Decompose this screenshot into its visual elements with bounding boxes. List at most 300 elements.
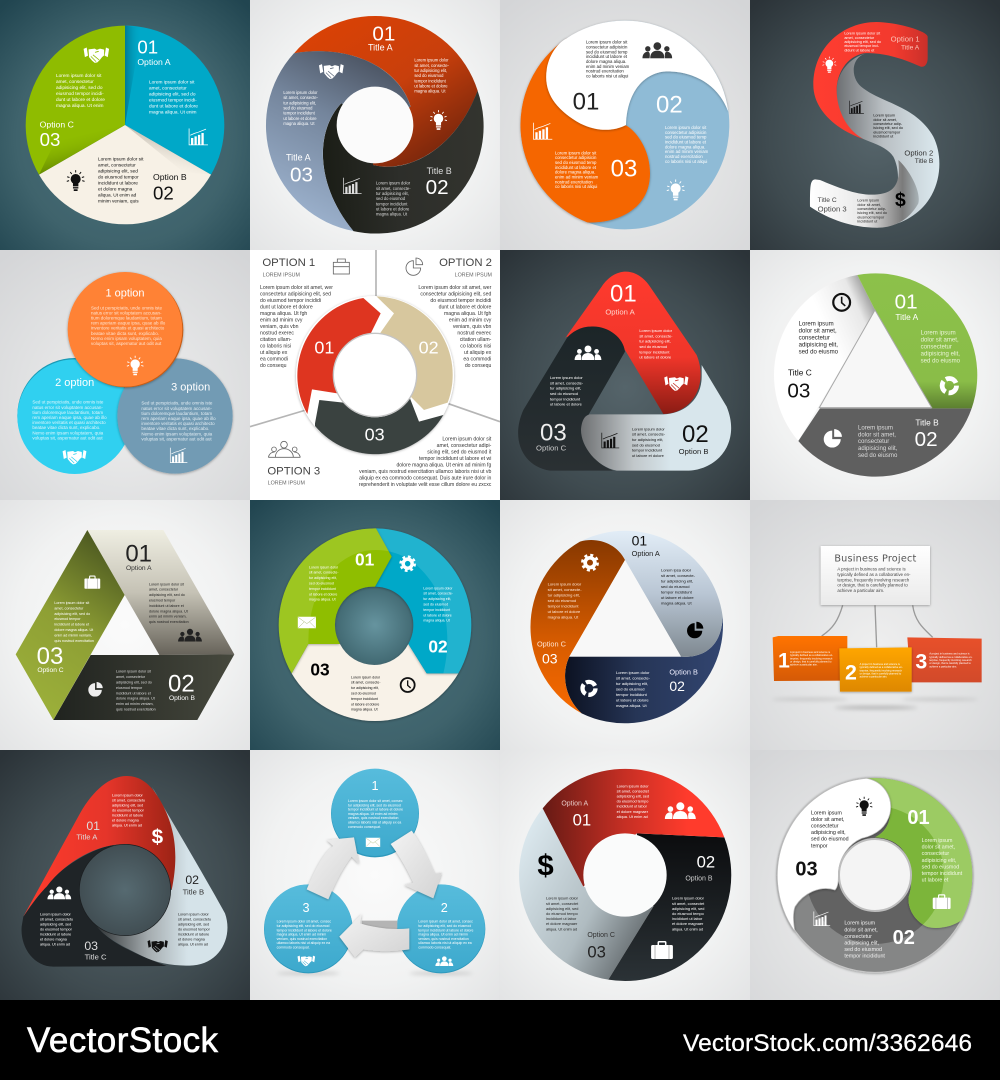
body text grey: Lorem ipsum bbox=[858, 425, 893, 431]
body text cream: sit amet, consecte- bbox=[351, 681, 381, 685]
body text blue: sed do eiusmod bbox=[661, 584, 690, 589]
body text olive: quis nostrud exercitation bbox=[54, 639, 94, 643]
body text A: amet, consectetur bbox=[149, 86, 187, 92]
number 1: 1 bbox=[371, 779, 379, 793]
body text black: do eiusmod tempo bbox=[672, 912, 704, 916]
body text blue: Nemo enim ipsam voluptatem, quia bbox=[32, 430, 104, 435]
body text black: Lorem ipsum dolor bbox=[376, 181, 411, 186]
body text white: dolor sit amet, bbox=[811, 817, 844, 823]
number 02: 02 bbox=[185, 873, 199, 887]
body text orange lobe: sed do eiusmod temp bbox=[555, 160, 597, 165]
card 2 text: achieve a particular aim. bbox=[860, 675, 888, 679]
body text beige: dolore magna aliqua. Ut bbox=[149, 609, 188, 613]
body text olive: enim ad minim veniam, bbox=[54, 633, 92, 637]
body text orange lobe: co laboris nisi ut aliqui bbox=[555, 184, 597, 189]
subheading 2: LOREM IPSUM bbox=[455, 272, 492, 278]
card 2 text: typically defined as a collaborative en- bbox=[860, 665, 903, 669]
body text red: et dolore magnaer bbox=[617, 810, 649, 814]
body text light: sed do eiusmod bbox=[632, 442, 660, 447]
body text light: incididunt ut labore bbox=[178, 932, 209, 936]
number 03: 03 bbox=[40, 129, 60, 150]
body text white: Lorem ipsum bbox=[811, 810, 842, 816]
body text blue: tempor incididunt bbox=[661, 590, 693, 595]
body text orange lobe: nostrud exercitation bbox=[555, 179, 593, 184]
body text light: tempor incididunt bbox=[632, 448, 663, 453]
icon: clock bbox=[401, 678, 415, 692]
body text option 3: Lorem ipsum dolor sit bbox=[442, 437, 492, 443]
heading Option 2: Option 2 bbox=[904, 149, 933, 158]
body text black: et dolore magnaer bbox=[672, 922, 704, 926]
body text light: Lorem ipsum dolor bbox=[178, 912, 210, 916]
number 03: 03 bbox=[795, 858, 818, 880]
body text 2: ullamco laboris nisi ut aliquip ex ea bbox=[418, 941, 472, 945]
body text dark: tempor incididunt bbox=[550, 396, 581, 401]
body text option 2: nostrud exerec bbox=[457, 330, 492, 336]
body text C: adipisicing elit, sed do bbox=[56, 85, 103, 91]
body text blue: Lorem ipsa dolor bbox=[661, 568, 692, 573]
sector C green bbox=[26, 26, 125, 175]
body text olive: Lorem ipsum dolor sit bbox=[54, 601, 89, 605]
body text black: aliqua. Ut enim ad bbox=[672, 927, 703, 931]
body text white: adipisicing elit, bbox=[811, 830, 846, 836]
body text grey: tempor incididunt bbox=[283, 111, 316, 116]
band 02 light bbox=[581, 365, 731, 471]
body text orange: magna aliqua. Ut bbox=[548, 614, 579, 619]
body text olive: amet, consectetur bbox=[54, 606, 84, 610]
body text steel: Sed ut perspiciatis, unde omnis iste bbox=[141, 401, 213, 406]
lobe 01 white bbox=[546, 21, 728, 130]
body text 2: magna aliqua. Ut enim ad minim bbox=[418, 933, 468, 937]
body text orange: sit amet, consecte- bbox=[548, 587, 582, 592]
body text A: Lorem ipsum dolor sit bbox=[149, 80, 195, 86]
body text blue: Lorem ipsum dolor bbox=[423, 586, 453, 590]
body text navy: sed do eiusmod bbox=[616, 686, 645, 691]
segment dark bbox=[22, 845, 167, 967]
label Option C: Option C bbox=[40, 119, 74, 129]
body text red: ut labore et dolore bbox=[639, 355, 672, 360]
heading Option 1: Option 1 bbox=[891, 35, 920, 44]
body text 2: veniam, quis nostrud exercitation bbox=[418, 937, 469, 941]
body text orange lobe: Lorem ipsum dolor sit bbox=[555, 150, 597, 155]
band 03 dark bbox=[518, 327, 625, 471]
body text white: consectetur bbox=[799, 336, 830, 342]
label Option C: Option C bbox=[587, 932, 615, 939]
body text cream: magna aliqua. Ut bbox=[351, 708, 378, 712]
panel: three blue circles with arrows bbox=[250, 750, 500, 1000]
card 2 bbox=[839, 647, 912, 692]
number 02: 02 bbox=[153, 182, 174, 203]
circle 2 blue bbox=[17, 358, 132, 474]
panel: rounded triangle ribbon bbox=[500, 250, 750, 500]
body text light: aliqua. Ut enim ad bbox=[546, 927, 577, 931]
panel: circle with triangle cut-out bbox=[750, 250, 1000, 500]
segment red bbox=[543, 769, 724, 887]
label Option B: Option B bbox=[669, 667, 698, 676]
body text blue: tur adipisicing elit, bbox=[661, 579, 693, 584]
body text 1: Lorem ipsum dolor sit amet, consec bbox=[348, 799, 403, 803]
number 03: 03 bbox=[542, 650, 558, 666]
body text white lobe: dolore magna aliqua. bbox=[586, 59, 626, 64]
segment blue grey bbox=[580, 531, 723, 657]
body text light: et dolore magnaer bbox=[546, 922, 578, 926]
body text 1: ullamco laboris nisi ut aliquip ex ea bbox=[348, 820, 401, 824]
body text option 1: nostrud exerec bbox=[260, 330, 294, 336]
panel: teal pie with three sectors bbox=[0, 0, 250, 250]
body text B: adipisicing elit, sed bbox=[98, 168, 138, 174]
inner triangle bbox=[819, 310, 932, 408]
segment green bbox=[279, 528, 392, 673]
body text 1: tur adipisicing elit, sed do eiusmod bbox=[348, 803, 401, 807]
body text red: sed do eiusmod bbox=[414, 73, 444, 78]
body text red: tempor incididunt bbox=[639, 349, 670, 354]
body text white: adipisicing elit, bbox=[799, 342, 838, 348]
body text red: didunt ut labore et bbox=[844, 48, 875, 52]
body text grey: adipisicing elit, bbox=[858, 446, 898, 452]
body text option 2: citation ullam- bbox=[460, 337, 492, 343]
icon: pie outline bbox=[406, 258, 423, 275]
body text red: do eiusmod tempor bbox=[112, 808, 145, 812]
body text grey: magna aliqua. Ut bbox=[283, 121, 315, 126]
heading OPTION 3: OPTION 3 bbox=[267, 466, 320, 478]
body text white lobe: Lorem ipsum dolor sit bbox=[586, 40, 628, 45]
body text white: sed do eiusmod bbox=[811, 837, 849, 843]
body text B: incididunt ut labore bbox=[98, 180, 138, 186]
body text steel: natus error sit voluptatem accusan- bbox=[141, 406, 212, 411]
board text: achieve a particular aim. bbox=[837, 588, 884, 593]
card 3 text: A project in business and science is bbox=[929, 652, 970, 656]
body text light: do eiusmod tempor bbox=[178, 927, 211, 931]
body text grey: tempor incididunt bbox=[844, 954, 885, 960]
body text red: adipisicing elit, sed bbox=[112, 803, 143, 807]
body text navy: tur adipisicing elit, bbox=[616, 681, 648, 686]
body text green: adipisicing elit, bbox=[921, 351, 960, 357]
icon: briefcase bbox=[84, 576, 100, 589]
body text C: dunt ut labore et dolore bbox=[56, 97, 105, 103]
label Title B: Title B bbox=[915, 418, 939, 428]
label Option B: Option B bbox=[169, 695, 195, 702]
body text red: adipisicing elit, sed bbox=[617, 795, 649, 799]
number 01: 01 bbox=[355, 550, 375, 570]
body text green: dolor sit amet, bbox=[922, 845, 955, 851]
footer bar bbox=[0, 1000, 1000, 1080]
body text bottom: dolor sit amet, bbox=[857, 203, 881, 207]
number 01: 01 bbox=[632, 533, 647, 549]
icon: chart bbox=[189, 128, 208, 145]
label Option B: Option B bbox=[679, 447, 708, 456]
label Title C: Title C bbox=[818, 197, 837, 204]
body text green: magna aliqua. Ut bbox=[309, 598, 336, 602]
body text A: magna aliqua. Ut enim bbox=[149, 110, 197, 116]
body text dark: ut labore et dolore bbox=[550, 402, 583, 407]
ribbon top red bbox=[813, 22, 928, 139]
body text dark: tur adipisicing elit, bbox=[550, 386, 581, 391]
body text navy: tempor incididunt bbox=[616, 692, 648, 697]
heading 2 option: 2 option bbox=[55, 377, 94, 389]
body text bottom: Lorem ipsum bbox=[857, 199, 879, 203]
body text orange: sed do eiusmod bbox=[548, 598, 576, 603]
card 2 text: A project in business and science is bbox=[860, 662, 901, 666]
icon: handshake bbox=[319, 64, 344, 79]
body text black: sed do eiusmod bbox=[376, 196, 406, 201]
segment grey inner bbox=[806, 806, 944, 944]
circle 1 bbox=[331, 769, 419, 857]
body text B: minim veniam, quis bbox=[98, 198, 139, 204]
body text blue: ut labore et dolore bbox=[423, 613, 452, 617]
label Option A: Option A bbox=[126, 565, 152, 572]
number 02: 02 bbox=[168, 671, 195, 698]
number 03: 03 bbox=[611, 156, 637, 183]
body text dark: aliqua. Ut enim ad bbox=[40, 942, 70, 946]
body text 1: tempor incididunt ut labore et dolore bbox=[348, 808, 403, 812]
segment navy bbox=[565, 617, 723, 723]
icon: handshake bbox=[298, 956, 315, 966]
body text blue lobe: incididunt ut labore et bbox=[665, 139, 707, 144]
body text dark: incididunt ut labore et bbox=[116, 691, 151, 695]
body text dark: sed do eiusmod bbox=[550, 391, 578, 396]
body text grey: dolor sit amet, bbox=[844, 927, 878, 933]
icon: people bbox=[47, 886, 71, 899]
body text option 2: magna aliqua. Ut fgh bbox=[444, 311, 491, 317]
circle 3 steel bbox=[117, 358, 233, 474]
body text navy: Lorem ipsum dolor bbox=[616, 670, 650, 675]
number 03: 03 bbox=[540, 420, 567, 447]
centre hole bbox=[336, 586, 414, 664]
body text green: consectetur bbox=[921, 345, 952, 351]
body text blue: ut labore et dolore bbox=[661, 595, 694, 600]
icon: bulb bbox=[856, 797, 872, 816]
body text C: Lorem ipsum dolor sit bbox=[56, 73, 102, 79]
body text A: adipisicing elit, sed do bbox=[149, 92, 196, 98]
body text option 2: dunt ut labore et dolore bbox=[439, 304, 491, 310]
label Option B: Option B bbox=[153, 172, 187, 182]
body text blue: tempor incididunt bbox=[423, 608, 450, 612]
body text beige: amet, consectetur bbox=[149, 588, 179, 592]
number 01: 01 bbox=[314, 337, 334, 357]
body text cream: tempor incididunt bbox=[351, 697, 378, 701]
label Option C: Option C bbox=[537, 639, 567, 648]
segment white bbox=[777, 778, 891, 932]
body text steel: Nemo enim ipsam voluptatem, quia bbox=[141, 431, 213, 436]
card 1 bbox=[773, 636, 847, 681]
card 2 text: terprise, frequently involving research bbox=[860, 668, 903, 672]
body text C: magna aliqua. Ut enim bbox=[56, 103, 104, 109]
body text green: sed do eiusmo bbox=[921, 358, 961, 364]
body text red: sit amet, consecte- bbox=[639, 333, 673, 338]
body text dark: amet, consectetur bbox=[116, 675, 146, 679]
body text orange: voluptas sit, aspernatur aut odit aut bbox=[91, 341, 162, 346]
number 2: 2 bbox=[845, 660, 857, 684]
body text red: incididunt ut labore bbox=[112, 813, 143, 817]
body text cream: tur adipisicing elit, bbox=[351, 686, 379, 690]
segment red bbox=[23, 776, 175, 917]
body text light: aliqua. Ut enim ad bbox=[178, 942, 208, 946]
segment green bbox=[857, 273, 977, 408]
body text red: eiusmod tempor inci- bbox=[844, 44, 880, 48]
card 1 text: terprise, frequently involving research bbox=[790, 656, 833, 660]
number 02: 02 bbox=[426, 176, 449, 199]
body text 3: magna aliqua. Ut enim ad minim bbox=[277, 933, 326, 937]
circle 1 orange bbox=[68, 272, 183, 387]
connector lines bbox=[822, 605, 933, 647]
body text black: tempor incididunt bbox=[376, 201, 408, 206]
body text blue: magna aliqua. Ut bbox=[661, 601, 692, 606]
body text dark: Lorem ipsum dolor sit bbox=[116, 670, 151, 674]
number 01: 01 bbox=[86, 819, 100, 833]
number 02: 02 bbox=[656, 92, 683, 119]
body text blue: tium doloremque laudantium, totam bbox=[32, 410, 103, 415]
body text beige: quis nostrud exercitation bbox=[149, 620, 189, 624]
segment 01 red bbox=[297, 298, 381, 414]
number 01: 01 bbox=[137, 36, 158, 57]
icon: chart bbox=[849, 101, 864, 114]
body text dark: quis nostrud exercitation bbox=[116, 707, 156, 711]
ribbon bottom white bbox=[810, 160, 919, 228]
body text blue: Sed ut perspiciatis, unde omnis iste bbox=[32, 400, 104, 405]
label Option C: Option C bbox=[536, 443, 567, 452]
body text grey: isicing elit, sed do bbox=[873, 126, 903, 130]
body text dark: Lorem ipsum dolor bbox=[40, 912, 72, 916]
centre hole bbox=[583, 833, 667, 917]
body text blue: sed do eiusmod bbox=[423, 603, 448, 607]
body text beige: enim ad minim veniam, bbox=[149, 615, 187, 619]
body text grey: dolor sit amet, bbox=[858, 432, 896, 438]
body text olive: incididunt ut labore et bbox=[54, 623, 89, 627]
segment green bbox=[867, 778, 972, 928]
panel: green grey white swirl bbox=[750, 750, 1000, 1000]
sector A blue bbox=[125, 26, 224, 175]
label Title B: Title B bbox=[183, 887, 204, 896]
icon: briefcase outline bbox=[333, 259, 349, 274]
body text red: tur adipisicing elit, bbox=[639, 339, 671, 344]
body text white: Lorem ipsum bbox=[799, 322, 834, 328]
body text grey: sed do eiusmod bbox=[844, 947, 882, 953]
body text A: dunt ut labore et dolore bbox=[149, 104, 198, 110]
segment blue bbox=[375, 528, 471, 673]
body text bottom: consectetur adip- bbox=[857, 207, 887, 211]
panel: red black silver ring bbox=[500, 750, 750, 1000]
body text option 1: co laboris nisi bbox=[260, 343, 291, 349]
body text blue lobe: co laboris nisi ut aliqui bbox=[665, 159, 707, 164]
body text blue: sit amet, consecte- bbox=[661, 573, 696, 578]
body text 3: tempor incididunt ut labore et dolore bbox=[277, 928, 332, 932]
body text navy: sit amet, consecte- bbox=[616, 675, 651, 680]
number 01: 01 bbox=[573, 89, 599, 116]
body text black: incididunt ut labor bbox=[672, 917, 703, 921]
body text option 3: sicing elit, sed do eiusmod it bbox=[427, 450, 492, 456]
body text 3: commodo consequat. bbox=[277, 945, 310, 949]
body text option 3: dolore magna aliqua. Ut enim ad minim fg bbox=[396, 463, 491, 469]
body text C: eiusmod tempor incidi- bbox=[56, 91, 104, 97]
body text blue lobe: enim ad minim veniam bbox=[665, 149, 709, 154]
body text bottom: incididunt ut bbox=[857, 219, 878, 223]
body text red: Lorem ipsum dolor bbox=[617, 784, 649, 788]
body text green: tempor incididunt bbox=[309, 587, 336, 591]
icon: mail bbox=[298, 617, 316, 628]
number 02: 02 bbox=[428, 637, 448, 657]
body text blue: beatae vitae dicta sunt, explicabo. bbox=[32, 425, 100, 430]
number 03: 03 bbox=[84, 939, 98, 953]
body text grey: tur adipisicing elit, bbox=[283, 100, 316, 105]
body text steel: voluptas sit, aspernatur aut odit aut bbox=[141, 436, 212, 441]
body text red: adipisicing elit, sed do bbox=[844, 40, 881, 44]
body text 1: magna aliqua. Ut enim ad minim bbox=[348, 812, 398, 816]
body text black: Lorem ipsum dolor bbox=[672, 897, 705, 901]
body text option 1: veniam, quis vbn bbox=[260, 324, 299, 330]
body text 3: tur adipisicing elit, sed do eiusmod bbox=[277, 924, 330, 928]
body text dark: et dolore magna bbox=[40, 937, 68, 941]
body text B: et dolore magna bbox=[98, 186, 133, 192]
icon: chart bbox=[343, 178, 362, 194]
panel: yin-yang circle bbox=[500, 0, 750, 250]
number 2: 2 bbox=[441, 901, 448, 915]
body text option 3: amet, consectetur adipi- bbox=[437, 443, 492, 449]
number 01: 01 bbox=[907, 807, 930, 829]
body text orange: tur adipisicing elit, bbox=[548, 592, 580, 597]
body text light: adipisicing elit, sed bbox=[546, 907, 578, 911]
arrow 3 to 1 bbox=[307, 837, 359, 899]
body text option 2: ut aliquip ex bbox=[464, 350, 492, 356]
icon: people bbox=[642, 42, 672, 58]
icon: people bbox=[665, 802, 696, 819]
body text dark: do eiusmod tempor bbox=[40, 927, 73, 931]
icon: clock bbox=[833, 294, 850, 311]
label Option A: Option A bbox=[632, 549, 660, 558]
body text white: sed do eiusmo bbox=[799, 349, 839, 355]
circle 3 bbox=[264, 884, 353, 973]
band dark bbox=[53, 654, 234, 720]
body text black: ut labore et dolore bbox=[376, 206, 410, 211]
subheading 3: LOREM IPSUM bbox=[268, 480, 305, 486]
body text grey: incididunt ut bbox=[873, 134, 894, 138]
body text orange: Nemo enim ipsam voluptatem, quia bbox=[91, 336, 162, 341]
panel: triangle with round hole bbox=[0, 750, 250, 1000]
icon: bulb bbox=[822, 57, 836, 73]
body text orange lobe: enim ad minim veniam bbox=[555, 174, 599, 179]
segment white bbox=[774, 275, 875, 441]
body text olive: dolore magna aliqua. Ut bbox=[54, 628, 93, 632]
board text: A project in business and science is bbox=[837, 567, 906, 572]
base circle blue bbox=[521, 21, 729, 229]
body text red: Lorem ipsum dolor bbox=[414, 58, 449, 63]
body text olive: adipisicing elit, sed do bbox=[54, 612, 90, 616]
card 1 text: typically defined as a collaborative en- bbox=[790, 653, 833, 657]
body text red: Lorem ipsum dolor bbox=[639, 328, 673, 333]
heading OPTION 1: OPTION 1 bbox=[262, 257, 315, 269]
body text C: amet, consectetur bbox=[56, 79, 94, 85]
number 03: 03 bbox=[587, 942, 606, 961]
body text option 2: Lorem ipsum dolor sit amet, wer bbox=[418, 285, 492, 291]
body text light: tur adipisicing elit, bbox=[632, 437, 663, 442]
body text green: Lorem ipsum bbox=[921, 331, 956, 337]
icon: bulb bbox=[127, 356, 143, 375]
body text option 1: ut aliquip ex bbox=[260, 350, 288, 356]
icon: gear bbox=[582, 555, 598, 570]
icon: bulb bbox=[430, 110, 447, 130]
body text black: tur adipisicing elit, bbox=[376, 191, 409, 196]
body text red: do eiusmod tempo bbox=[617, 800, 648, 804]
inner triangle bbox=[569, 560, 681, 657]
icon: chart bbox=[533, 123, 552, 140]
body text option 1: do eiusmod tempor incididi bbox=[260, 298, 321, 304]
body text green: tempor incididunt bbox=[922, 871, 963, 877]
body text dark: dolore magna aliqua. Ut bbox=[116, 697, 155, 701]
body text grey: Lorem ipsum dolor bbox=[283, 90, 318, 95]
body text steel: inventore veritatis et quasi architecto bbox=[141, 421, 215, 426]
body text green: sit amet, consecte- bbox=[309, 571, 339, 575]
segment light bbox=[519, 808, 653, 980]
body text beige: eiusmod tempor bbox=[149, 599, 176, 603]
number 01: 01 bbox=[610, 281, 637, 308]
